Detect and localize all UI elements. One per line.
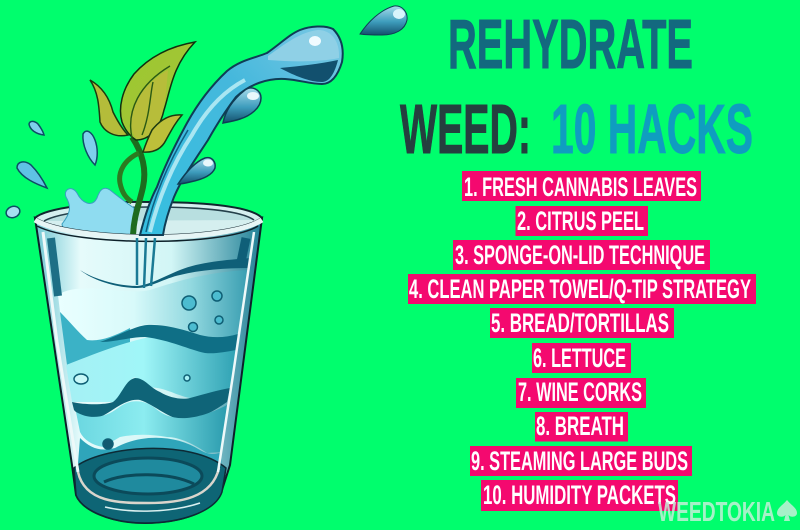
item 7 (516, 377, 646, 408)
item 5: 5. BREAD/TORTILLAS (491, 308, 669, 338)
blob lower highlight (203, 160, 213, 166)
icon: spade (777, 500, 797, 521)
item 2 (516, 206, 648, 236)
dark wave three (72, 378, 230, 420)
item 8 (535, 411, 628, 442)
illustration: glass of water with plant (5, 6, 407, 523)
left glass wall highlight (43, 232, 78, 472)
water layer three (66, 337, 238, 402)
large leaf (120, 42, 195, 140)
left dark glass reflection (51, 238, 58, 296)
blob upper (223, 88, 261, 123)
small drop four (5, 204, 21, 220)
left teal water (60, 312, 130, 365)
water stream (137, 26, 343, 288)
water layer two (58, 270, 247, 352)
list of hacks (408, 171, 756, 511)
rim outline (37, 226, 258, 241)
stream highlight (150, 80, 245, 232)
bubbles (74, 291, 223, 449)
item 1 (462, 171, 701, 202)
watermark (658, 496, 797, 527)
item 6: 6. LETTUCE (533, 343, 626, 373)
drop highlight (393, 9, 405, 19)
base inner ring (94, 458, 202, 494)
stream head light (268, 30, 339, 61)
item 6 (532, 343, 631, 373)
blob lower (178, 158, 215, 184)
title word weed: WEED: (400, 90, 531, 168)
stream body (140, 26, 343, 235)
water layer four (76, 401, 227, 453)
title (400, 5, 753, 168)
plant (90, 42, 195, 235)
base highlight (78, 468, 219, 503)
item 7: 7. WINE CORKS (518, 377, 642, 407)
tendril (120, 153, 139, 202)
blob upper highlight (247, 92, 259, 100)
small drop two (83, 131, 97, 165)
water splash (62, 188, 134, 238)
glass bottom (74, 448, 226, 523)
item 10: 10. HUMIDITY PACKETS (483, 480, 676, 510)
item 9 (470, 446, 692, 476)
item 8: 8. BREATH (536, 411, 624, 441)
base inner arc (104, 475, 194, 484)
small drop one (29, 121, 44, 135)
left leaf (90, 80, 128, 136)
stream inside glass (137, 238, 155, 288)
glass body (35, 218, 262, 523)
item 5 (490, 308, 674, 338)
leaf vein (131, 66, 170, 138)
stream head highlight (309, 36, 321, 46)
dark wave two (100, 325, 238, 353)
stream dark line (146, 130, 188, 232)
leaf right lobe (130, 70, 168, 139)
stem (132, 137, 144, 235)
flying drop right (360, 6, 407, 35)
right leaf (143, 115, 182, 152)
right glass wall highlight (218, 232, 254, 472)
glass base water (77, 438, 222, 478)
stream head shadow (280, 60, 338, 82)
upper dark wave (80, 258, 251, 288)
item 2: 2. CITRUS PEEL (517, 206, 644, 236)
inner rim line (44, 207, 254, 221)
lower base highlight (105, 503, 200, 511)
front rim (35, 220, 262, 237)
item 10 (481, 480, 678, 511)
right dark glass reflection (241, 238, 246, 262)
glass back rim (35, 202, 262, 240)
small drop three (17, 162, 47, 188)
